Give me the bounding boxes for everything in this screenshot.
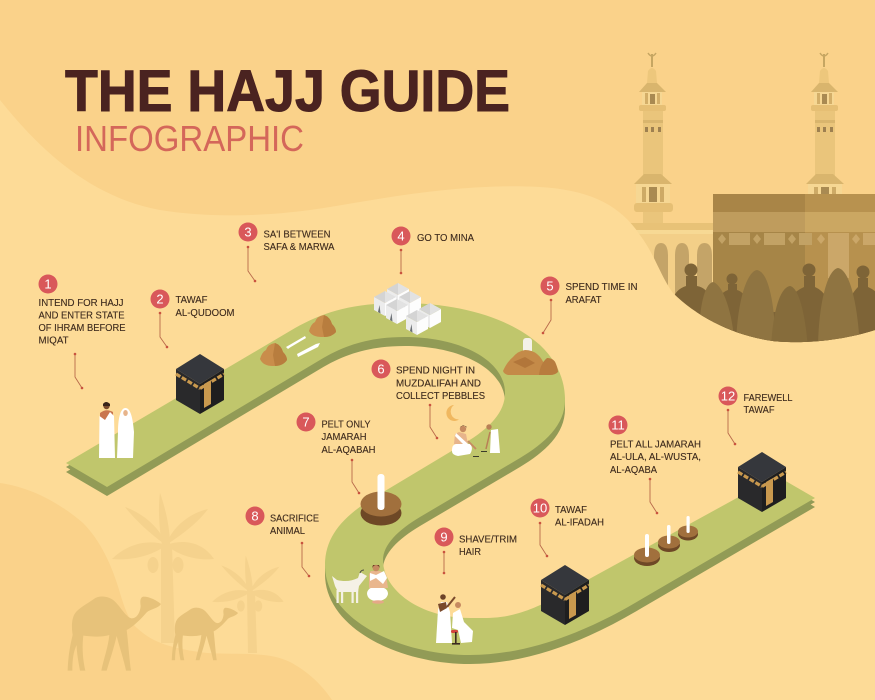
step 3: SA'I BETWEEN — [264, 230, 330, 240]
step 9: SHAVE/TRIM — [459, 534, 517, 546]
step 6: 6 — [377, 362, 385, 376]
icon: man with goat — [367, 565, 388, 604]
title: THE HAJJ GUIDE — [65, 59, 510, 124]
step 1: 1 — [44, 276, 52, 292]
right minaret — [806, 53, 844, 195]
step 9: 9 — [440, 530, 448, 544]
step 4: GO TO MINA — [417, 233, 474, 244]
step 2: TAWAF — [176, 295, 208, 306]
top background blob — [0, 0, 875, 342]
step 11: PELT ALL JAMARAH — [610, 440, 701, 450]
sand dune — [0, 483, 332, 700]
step 12: FAREWELL — [744, 393, 793, 404]
icon: jamarah small three — [678, 516, 698, 540]
icon: barber pilgrim — [436, 594, 455, 643]
step 10 — [530, 498, 604, 557]
step 7: AL-AQABAH — [322, 445, 376, 456]
mosque wall and arches — [630, 223, 713, 294]
step 4: 4 — [397, 228, 405, 244]
mosque and crowd scene — [620, 53, 875, 352]
step 6: MUZDALIFAH AND — [396, 378, 481, 390]
kaaba silhouette — [713, 194, 875, 342]
step 12: TAWAF — [744, 405, 774, 416]
step 11: 11 — [611, 418, 625, 432]
step 5 — [540, 276, 638, 334]
icon: jamarah pillar — [360, 474, 402, 526]
step 6: COLLECT PEBBLES — [396, 391, 485, 402]
icon: rock one — [260, 343, 287, 366]
step 12 — [718, 386, 793, 445]
step 10: AL-IFADAH — [555, 518, 604, 528]
step 5: 5 — [546, 278, 554, 294]
icon: rock two — [309, 315, 336, 337]
step 2: AL-QUDOOM — [176, 308, 234, 319]
step 1: AND ENTER STATE — [38, 310, 125, 322]
icon: seated pilgrim being shaved — [451, 602, 473, 645]
step 10: 10 — [533, 500, 547, 516]
subtitle: INFOGRAPHIC — [75, 118, 304, 159]
bottom-left scene — [0, 483, 332, 700]
step 4 — [392, 226, 474, 274]
winding road — [66, 303, 815, 664]
icon: jamarah small one — [634, 534, 660, 566]
palm tree small — [212, 556, 284, 653]
step 9 — [434, 528, 517, 574]
step 8 — [246, 506, 319, 577]
step 10: TAWAF — [555, 505, 587, 516]
step 7 — [296, 412, 376, 494]
icon: safa marwa arrows — [286, 336, 320, 357]
icon: jamarah small two — [658, 525, 680, 552]
icon: crescent moon — [446, 405, 459, 421]
step 11: AL-ULA, AL-WUSTA, — [610, 452, 701, 463]
step 3: 3 — [244, 224, 252, 240]
icon: kaaba at Tawaf al-Ifadah — [541, 565, 589, 625]
step 6 — [372, 360, 485, 439]
camel small — [172, 608, 238, 660]
step 8: SACRIFICE — [270, 514, 319, 524]
step 11 — [608, 416, 701, 514]
palm tree large — [112, 493, 214, 643]
step 9: HAIR — [459, 547, 481, 558]
step 1: OF IHRAM BEFORE — [38, 323, 126, 334]
left minaret — [634, 53, 673, 224]
step 7: 7 — [302, 414, 310, 430]
step 6: SPEND NIGHT IN — [396, 366, 475, 376]
step 1: MIQAT — [38, 336, 68, 346]
icon: mount arafat — [503, 338, 558, 375]
crowd silhouettes — [674, 264, 875, 342]
icon: kaaba at farewell tawaf — [738, 452, 786, 512]
step 3 — [238, 222, 335, 282]
step 7: JAMARAH — [322, 432, 366, 443]
step 5: ARAFAT — [566, 295, 602, 306]
icon: kaaba at start — [176, 354, 224, 414]
camel large — [68, 597, 161, 671]
icon: standing pilgrim — [486, 424, 500, 453]
step 1: INTEND FOR HAJJ — [38, 298, 124, 309]
step 2 — [150, 290, 234, 348]
step 5: SPEND TIME IN — [566, 282, 638, 293]
step 8: ANIMAL — [270, 526, 305, 537]
icon: pilgrims in ihram — [99, 402, 134, 458]
step 2: 2 — [156, 292, 164, 306]
icon: goat — [332, 570, 367, 603]
step 12: 12 — [721, 388, 735, 404]
step 7: PELT ONLY — [322, 420, 371, 430]
step 11: AL-AQABA — [610, 465, 657, 476]
icon: tents of Mina — [374, 283, 441, 335]
step 8: 8 — [251, 508, 259, 524]
icon: pilgrim collecting pebbles — [452, 426, 487, 457]
step 3: SAFA & MARWA — [264, 242, 335, 253]
step 1 — [38, 274, 126, 389]
